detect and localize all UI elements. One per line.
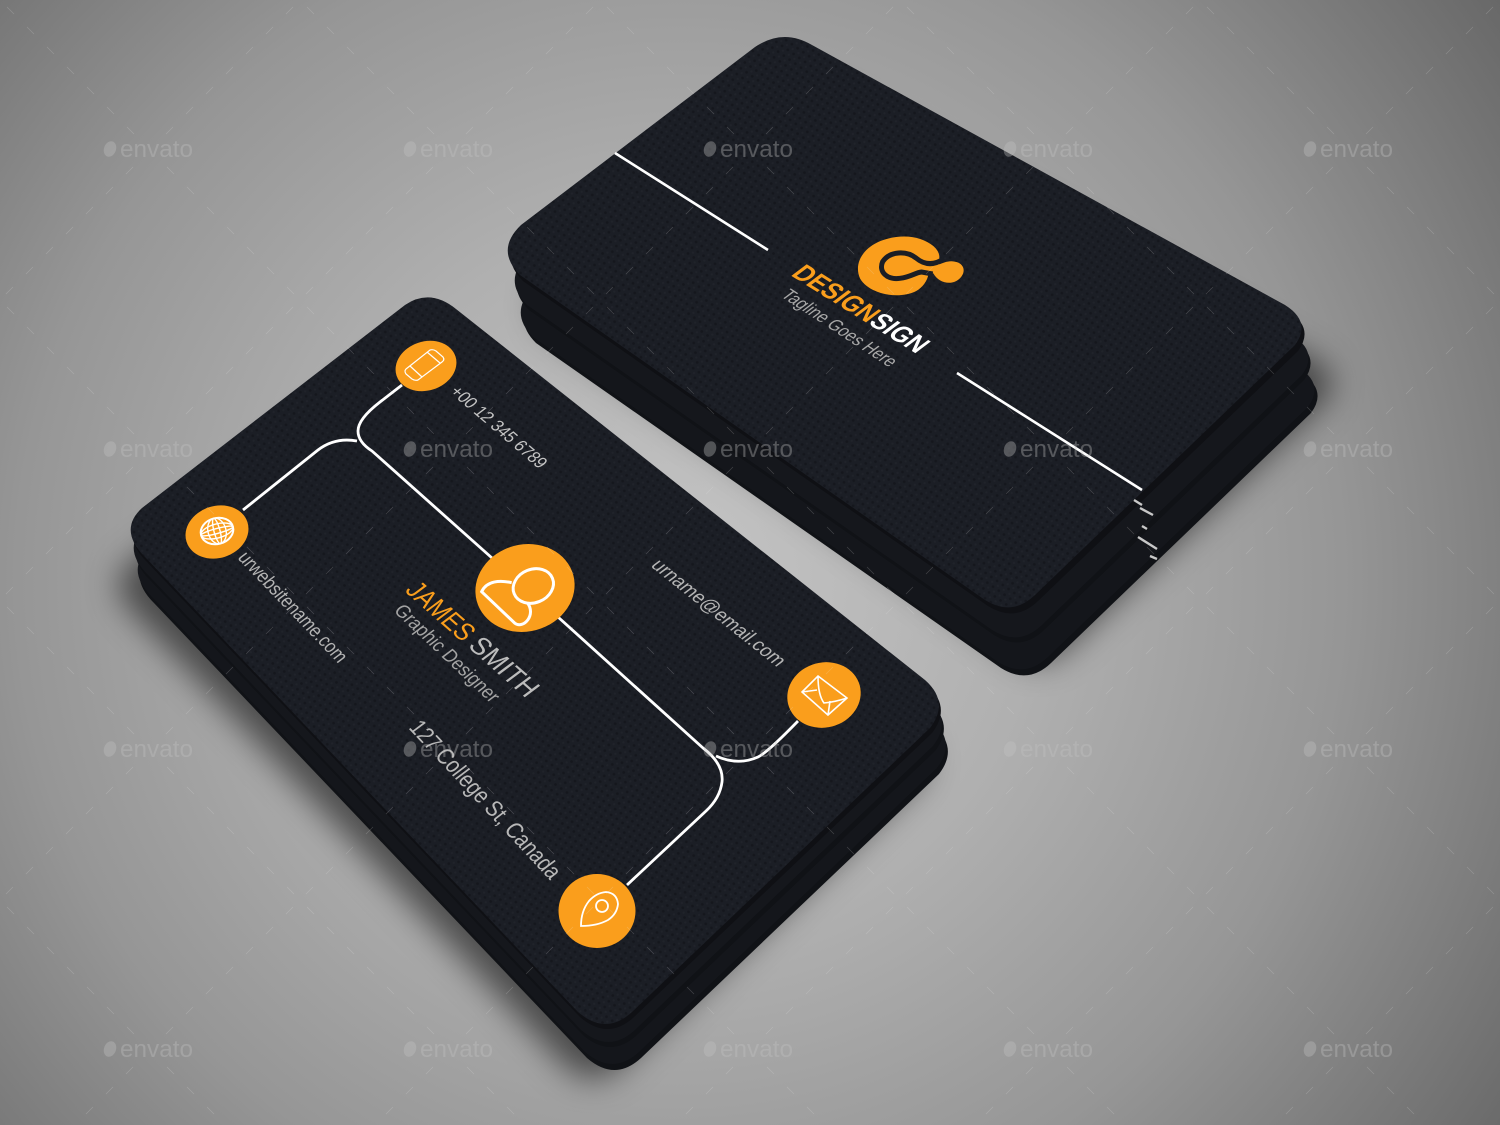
- white divider right: [957, 373, 1142, 490]
- envato watermarks: envato: [720, 736, 793, 763]
- envato watermarks: envato: [120, 736, 193, 763]
- location pin badge: [558, 874, 636, 948]
- envato watermarks: envato: [120, 436, 193, 463]
- envato watermarks: envato: [1320, 136, 1393, 163]
- envato watermarks: envato: [1320, 736, 1393, 763]
- logo wordmark: DESIGN: [785, 260, 887, 327]
- email text: urname@email.com: [646, 556, 791, 670]
- envato watermarks: envato: [720, 436, 793, 463]
- envato watermarks: envato: [1020, 136, 1093, 163]
- drop shadows: [119, 92, 1332, 1079]
- address text: 127 College St, Canada: [403, 715, 567, 884]
- logo wordmark: [785, 260, 937, 358]
- envato watermarks: envato: [120, 136, 193, 163]
- envato watermarks: envato: [420, 436, 493, 463]
- logo mark: [858, 237, 964, 295]
- envato watermarks: envato: [420, 736, 493, 763]
- tagline: Tagline Goes Here: [776, 286, 902, 370]
- envato watermarks: envato: [1320, 1036, 1393, 1063]
- portrait card stack, contact side: [131, 297, 948, 1070]
- name: JAMES: [399, 576, 483, 646]
- mail badge: [780, 654, 868, 736]
- name: [399, 576, 546, 702]
- envato watermarks: envato: [1320, 436, 1393, 463]
- envato watermarks: envato: [420, 136, 493, 163]
- logo wordmark: SIGN: [863, 308, 937, 358]
- website globe badge: [179, 497, 255, 567]
- name: SMITH: [462, 631, 546, 702]
- envato watermarks: [102, 136, 1393, 1063]
- envato watermarks: envato: [420, 1036, 493, 1063]
- person badge: [465, 533, 585, 643]
- website text: urwebsitename.com: [233, 548, 352, 667]
- job title: Graphic Designer: [389, 601, 505, 707]
- envato watermarks: envato: [1020, 1036, 1093, 1063]
- envato watermarks: envato: [720, 1036, 793, 1063]
- connector lines: [243, 385, 798, 885]
- envato watermarks: envato: [120, 1036, 193, 1063]
- landscape card stack, back side: [508, 37, 1318, 675]
- divider edge ticks on stacked cards: [1134, 500, 1157, 559]
- top card face: [131, 297, 939, 1024]
- top card face: [508, 37, 1302, 607]
- phone number: +00 12 345 6789: [446, 382, 552, 472]
- lower stacked cards: [133, 302, 948, 1070]
- envato watermarks: envato: [1020, 436, 1093, 463]
- lower stacked cards: [511, 43, 1318, 675]
- phone icon badge: [389, 333, 463, 399]
- white divider left: [615, 153, 768, 250]
- envato watermarks: envato: [720, 136, 793, 163]
- envato watermarks: envato: [1020, 736, 1093, 763]
